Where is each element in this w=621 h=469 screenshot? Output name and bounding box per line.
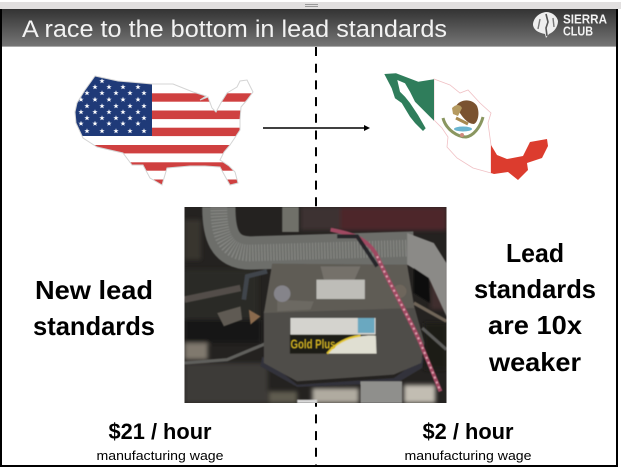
left statement: standards [33, 311, 155, 341]
Mexico wage: manufacturing wage [404, 448, 532, 463]
right statement: Lead [506, 238, 564, 268]
left statement: New lead [35, 275, 153, 305]
icon: sequoia cone [533, 12, 558, 38]
photo: car battery [184, 207, 446, 403]
Mexico wage [404, 419, 532, 463]
left statement [33, 275, 155, 341]
map canton with stars [76, 76, 152, 136]
arrow [263, 125, 370, 131]
hose [219, 207, 414, 253]
map: United States flag [74, 76, 254, 186]
battery top [264, 264, 414, 313]
rope [330, 230, 440, 391]
map: Mexico flag [384, 73, 548, 180]
map red band [491, 139, 548, 180]
battery terminals [274, 285, 290, 302]
map outline white band [434, 79, 491, 173]
battery brand text: Gold Plus [290, 338, 336, 352]
right statement: weaker [488, 347, 581, 377]
duct [407, 233, 446, 316]
battery strap [260, 356, 424, 387]
US wage: manufacturing wage [96, 448, 224, 463]
map green band [384, 73, 434, 131]
Mexico wage: $2 / hour [422, 419, 514, 444]
title: A race to the bottom in lead standards [22, 16, 447, 43]
right statement: are 10x [488, 310, 583, 340]
dashed divider [315, 47, 317, 465]
battery front [264, 307, 424, 381]
logo wordmark: CLUB [563, 24, 593, 38]
logo wordmark [563, 12, 607, 38]
top window strip [0, 2, 621, 9]
US wage: $21 / hour [108, 419, 212, 444]
right statement [474, 238, 596, 377]
coat of arms [443, 100, 483, 137]
US wage [96, 419, 224, 463]
logo wordmark: SIERRA [563, 12, 607, 26]
connector [282, 207, 299, 232]
header bar [2, 9, 616, 47]
cables left [184, 288, 240, 300]
right statement: standards [474, 274, 596, 304]
small sticker [360, 381, 402, 403]
logo: Sierra Club [533, 12, 607, 38]
cables right [414, 303, 446, 321]
